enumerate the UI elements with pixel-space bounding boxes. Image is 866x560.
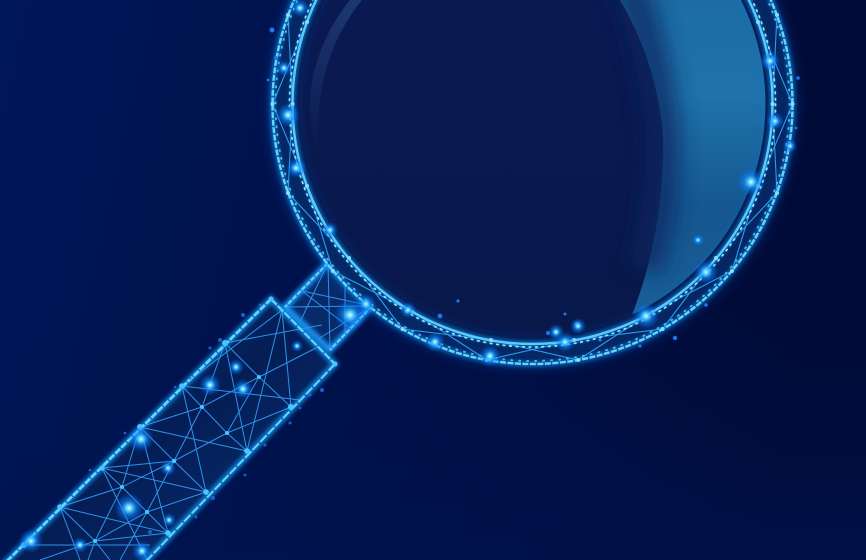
handle nodes: [21, 296, 338, 548]
handle: [0, 263, 372, 560]
handle loose particles: [89, 304, 324, 534]
lens inner shadow: [296, 0, 768, 340]
handle neck: [285, 263, 372, 350]
ring edge glow: [272, 0, 792, 364]
handle body: [0, 296, 338, 560]
ring band: [282, 0, 782, 354]
handle edges: [0, 299, 335, 560]
ring nodes: [270, 13, 794, 362]
ring mesh: [272, 15, 792, 360]
ring frame: [267, 0, 800, 364]
handle mesh: [24, 310, 322, 560]
ring edges: [272, 0, 792, 364]
ring glow: [282, 0, 782, 354]
glass lens: [292, 0, 800, 344]
left crescent highlight: [310, 0, 362, 112]
right crescent highlight: [620, 0, 766, 314]
ring loose particles: [267, 28, 800, 348]
crescent inner fade: [620, 0, 663, 270]
